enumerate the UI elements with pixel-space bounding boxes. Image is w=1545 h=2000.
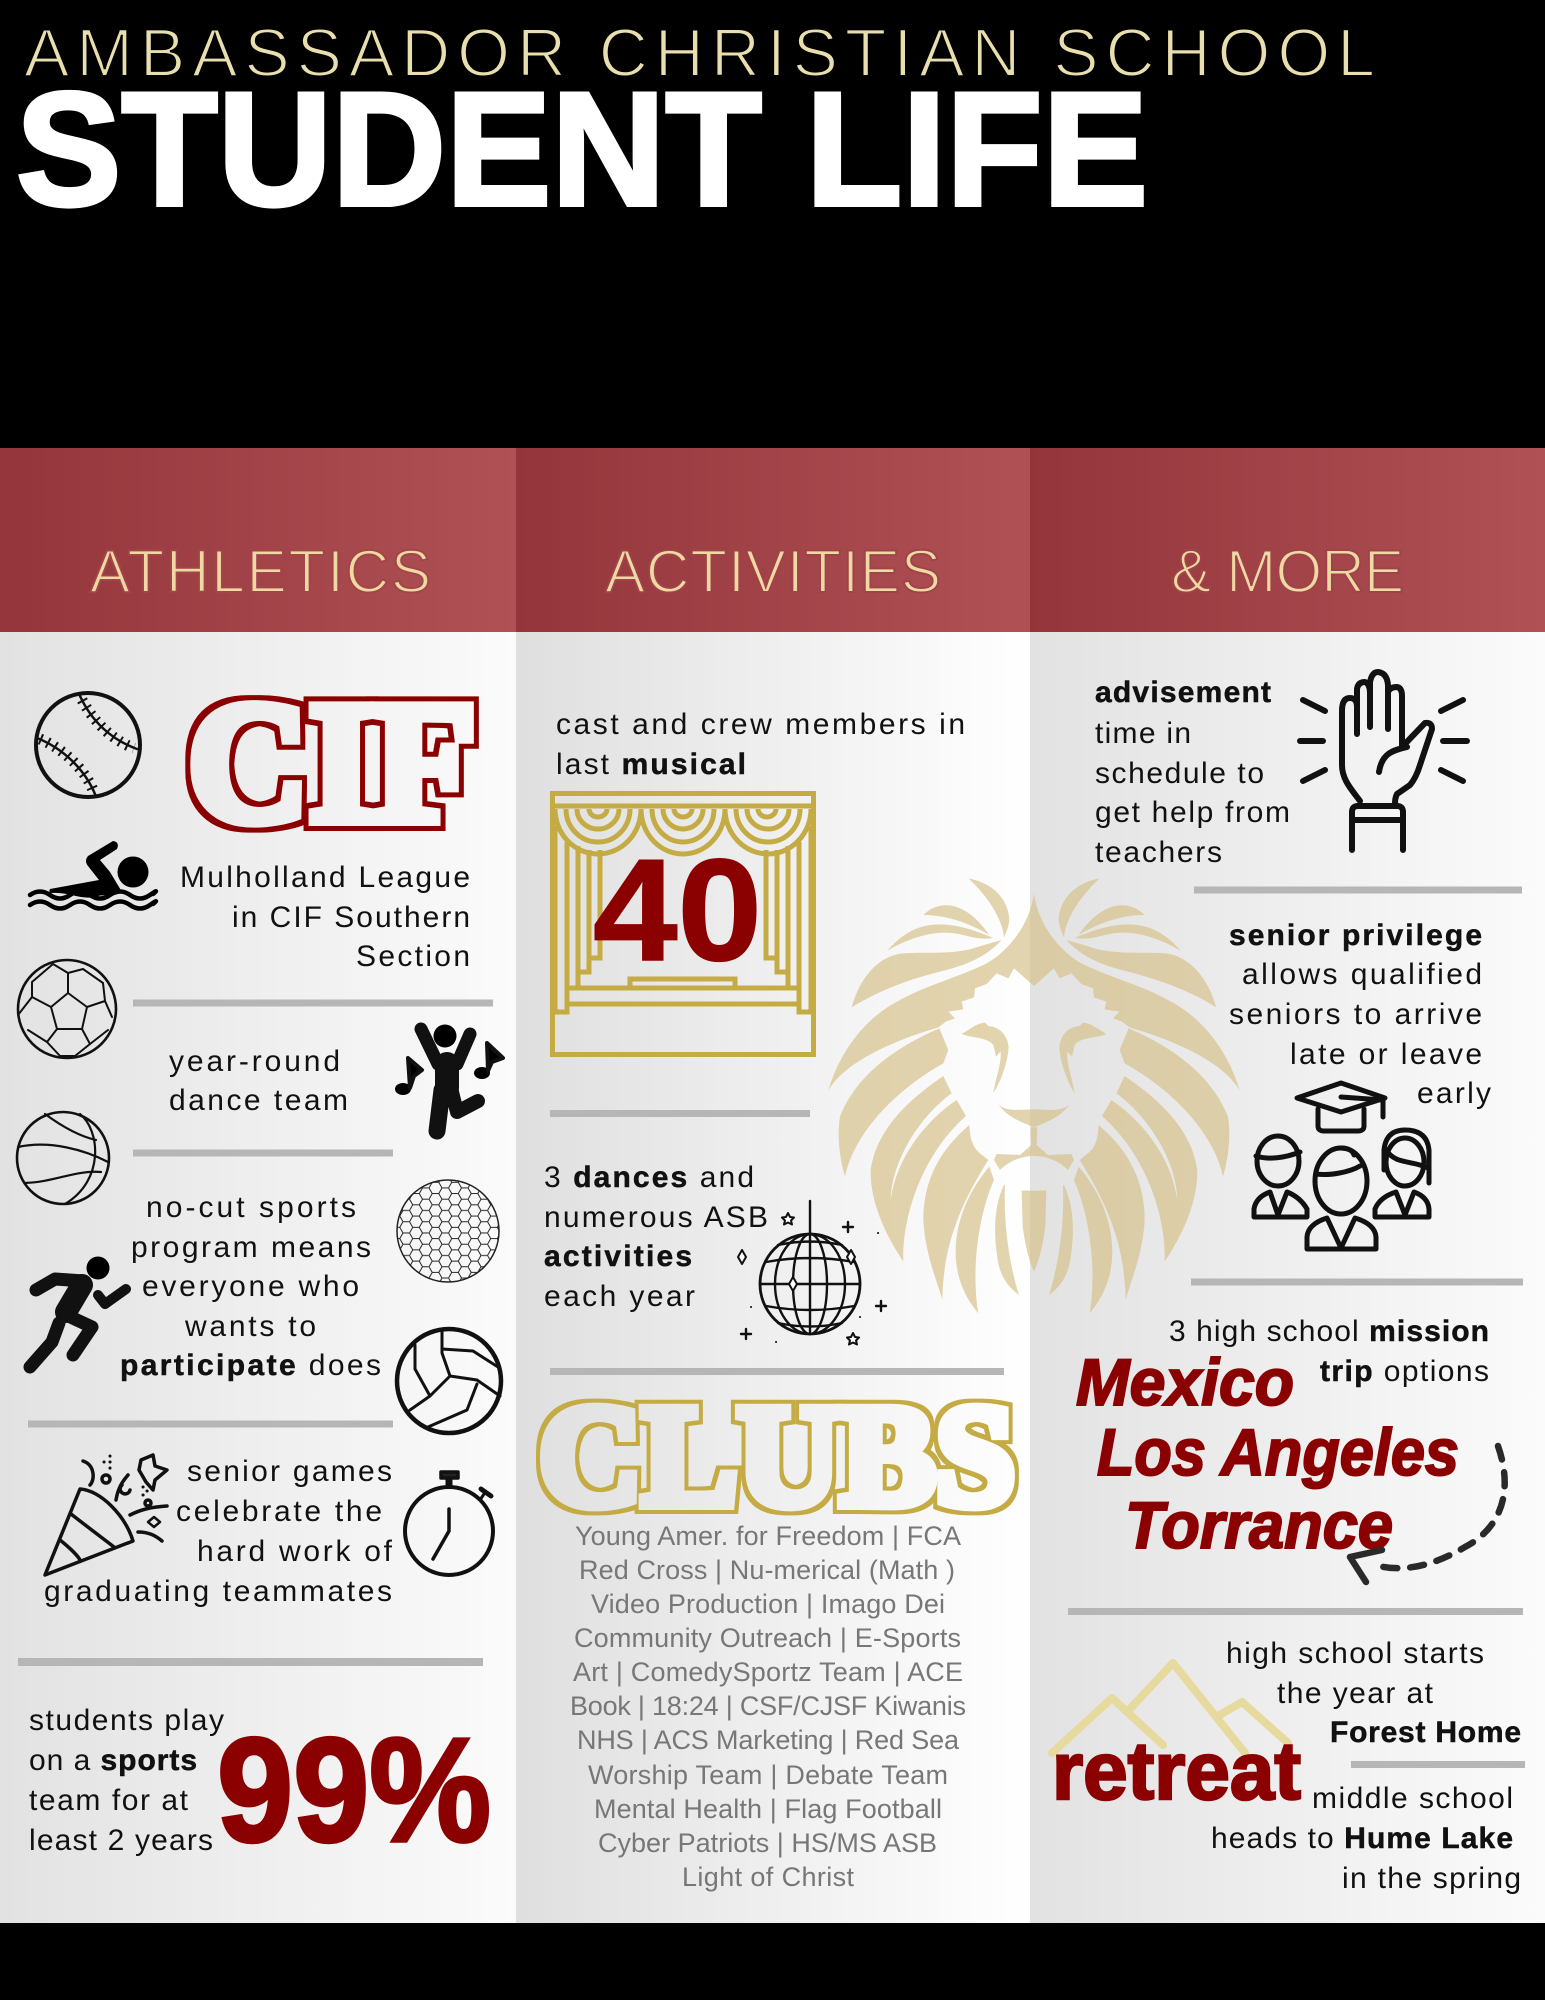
icon: party popper <box>45 1455 167 1575</box>
text: senior privilege <box>1229 919 1491 1110</box>
text: high school starts: Forest Home <box>1330 1716 1521 1749</box>
text: advisement <box>1095 676 1290 869</box>
text: students play: on a sports <box>29 1744 197 1777</box>
text: dance team: year-round <box>169 1045 340 1078</box>
text: middle school: heads to Hume Lake <box>1211 1822 1513 1855</box>
panel backgrounds and column headers <box>0 448 1545 1923</box>
text: mission destinations <box>1076 1345 1459 1562</box>
text: clubs list: Cyber Patriots | HS/MS ASB <box>598 1828 937 1858</box>
icon: disco ball <box>738 1201 886 1344</box>
icon: soccer ball <box>18 960 116 1058</box>
text: clubs list: Book | 18:24 | CSF/CJSF Kiwanis <box>570 1691 966 1721</box>
text: advisement: schedule to <box>1095 757 1264 790</box>
text: mission destinations: Torrance <box>1125 1488 1393 1562</box>
icon: lion watermark <box>828 878 1240 1313</box>
text: clubs list <box>570 1521 966 1892</box>
heading: more: & MORE <box>1171 538 1404 605</box>
logo text: CLUBS: CLUBS <box>539 1377 1015 1536</box>
text: middle school: middle school <box>1312 1782 1513 1815</box>
text: advisement: teachers <box>1095 836 1222 869</box>
icon: dancer <box>395 1024 503 1131</box>
text: no-cut sports: program means <box>131 1231 371 1264</box>
stat: 40: 40 <box>593 829 762 991</box>
text: advisement: advisement <box>1095 676 1271 709</box>
logo text: CIF: CIF <box>188 668 476 858</box>
text: advisement: get help from <box>1095 796 1290 829</box>
panel: activities <box>539 708 1015 1892</box>
text: senior games: senior games <box>187 1455 392 1488</box>
icon: swimmer <box>30 841 156 908</box>
icon: stopwatch <box>405 1472 493 1575</box>
text: Mulholland League: in CIF Southern <box>232 901 470 934</box>
text: clubs list: Red Cross | Nu-merical (Math ) <box>579 1555 955 1585</box>
text: no-cut sports: everyone who <box>142 1270 359 1303</box>
heading: athletics: ATHLETICS <box>90 538 431 605</box>
text: high school starts <box>1226 1637 1521 1749</box>
text: no-cut sports: wants to <box>184 1310 316 1343</box>
text: students play: students play <box>29 1704 224 1737</box>
text: senior games: celebrate the <box>176 1495 382 1528</box>
text: mission destinations: Los Angeles <box>1097 1415 1459 1489</box>
text: dances: each year <box>544 1280 695 1313</box>
text: mission trip <box>1169 1315 1489 1388</box>
heading: activities: ACTIVITIES <box>605 538 941 605</box>
text: senior games: hard work of <box>197 1535 393 1568</box>
text: senior privilege: seniors to arrive <box>1229 998 1482 1031</box>
icon: runner <box>30 1256 126 1367</box>
text: high school starts: high school starts <box>1226 1637 1484 1670</box>
text: senior privilege: late or leave <box>1290 1038 1482 1071</box>
text: middle school <box>1211 1782 1521 1895</box>
panel: athletics <box>17 668 503 1873</box>
text: dances: activities <box>544 1240 692 1273</box>
panel: more <box>1052 672 1525 1895</box>
text: students play: team for at <box>29 1784 189 1817</box>
text: dance team: dance team <box>169 1084 348 1117</box>
text: clubs list: NHS | ACS Marketing | Red Sea <box>577 1725 960 1755</box>
text: Mulholland League: Mulholland League <box>180 861 470 894</box>
icon: volleyball <box>397 1329 501 1433</box>
text: no-cut sports <box>120 1191 381 1382</box>
icon: raised hand <box>1300 672 1467 850</box>
text: clubs list: Worship Team | Debate Team <box>588 1760 948 1790</box>
stat: 99%: 99% <box>217 1708 491 1873</box>
word: retreat: retreat <box>1052 1726 1301 1817</box>
text: senior privilege: allows qualified <box>1242 958 1482 991</box>
text: senior games <box>44 1455 393 1608</box>
text: clubs list: Young Amer. for Freedom | FCA <box>575 1521 961 1551</box>
text: clubs list: Light of Christ <box>682 1862 854 1892</box>
arrow: dashed curve <box>1350 1446 1505 1582</box>
text: mission trip: 3 high school mission <box>1169 1315 1489 1348</box>
text: dances: numerous ASB <box>544 1201 768 1234</box>
text: senior games: graduating teammates <box>44 1575 392 1608</box>
text: high school starts: the year at <box>1277 1677 1434 1710</box>
text: cast and crew: last musical <box>556 748 746 781</box>
text: cast and crew <box>556 708 965 781</box>
text: students play: least 2 years <box>29 1824 213 1857</box>
text: middle school: in the spring <box>1342 1862 1521 1895</box>
text: no-cut sports: no-cut sports <box>146 1191 356 1224</box>
school name: AMBASSADOR CHRISTIAN SCHOOL <box>24 15 1375 91</box>
icon: mountains <box>1052 1663 1288 1753</box>
text: Mulholland League <box>180 861 470 973</box>
text: students play <box>29 1704 224 1857</box>
text: advisement: time in <box>1095 717 1191 750</box>
icon: baseball <box>36 693 140 797</box>
text: senior privilege: senior privilege <box>1229 919 1482 952</box>
text: dance team <box>169 1045 348 1117</box>
icon: theatre stage <box>552 794 814 1054</box>
icon: basketball <box>17 1112 109 1204</box>
text: mission trip: trip options <box>1320 1355 1489 1388</box>
text: clubs list: Art | ComedySportz Team | ACE <box>573 1657 963 1687</box>
icon: golf ball <box>397 1180 499 1282</box>
text: Mulholland League: Section <box>356 940 470 973</box>
text: mission destinations: Mexico <box>1076 1345 1294 1419</box>
text: no-cut sports: participate does <box>120 1349 381 1382</box>
text: clubs list: Mental Health | Flag Football <box>594 1794 942 1824</box>
text: clubs list: Community Outreach | E-Sports <box>574 1623 961 1653</box>
icon: graduates <box>1254 1083 1429 1249</box>
text: clubs list: Video Production | Imago Dei <box>591 1589 945 1619</box>
text: cast and crew: cast and crew members in <box>556 708 965 741</box>
panel: header band <box>0 0 1545 448</box>
title: STUDENT LIFE <box>16 59 1148 240</box>
text: senior privilege: early <box>1417 1077 1491 1110</box>
text: dances <box>544 1161 768 1313</box>
text: dances: 3 dances and <box>544 1161 754 1194</box>
